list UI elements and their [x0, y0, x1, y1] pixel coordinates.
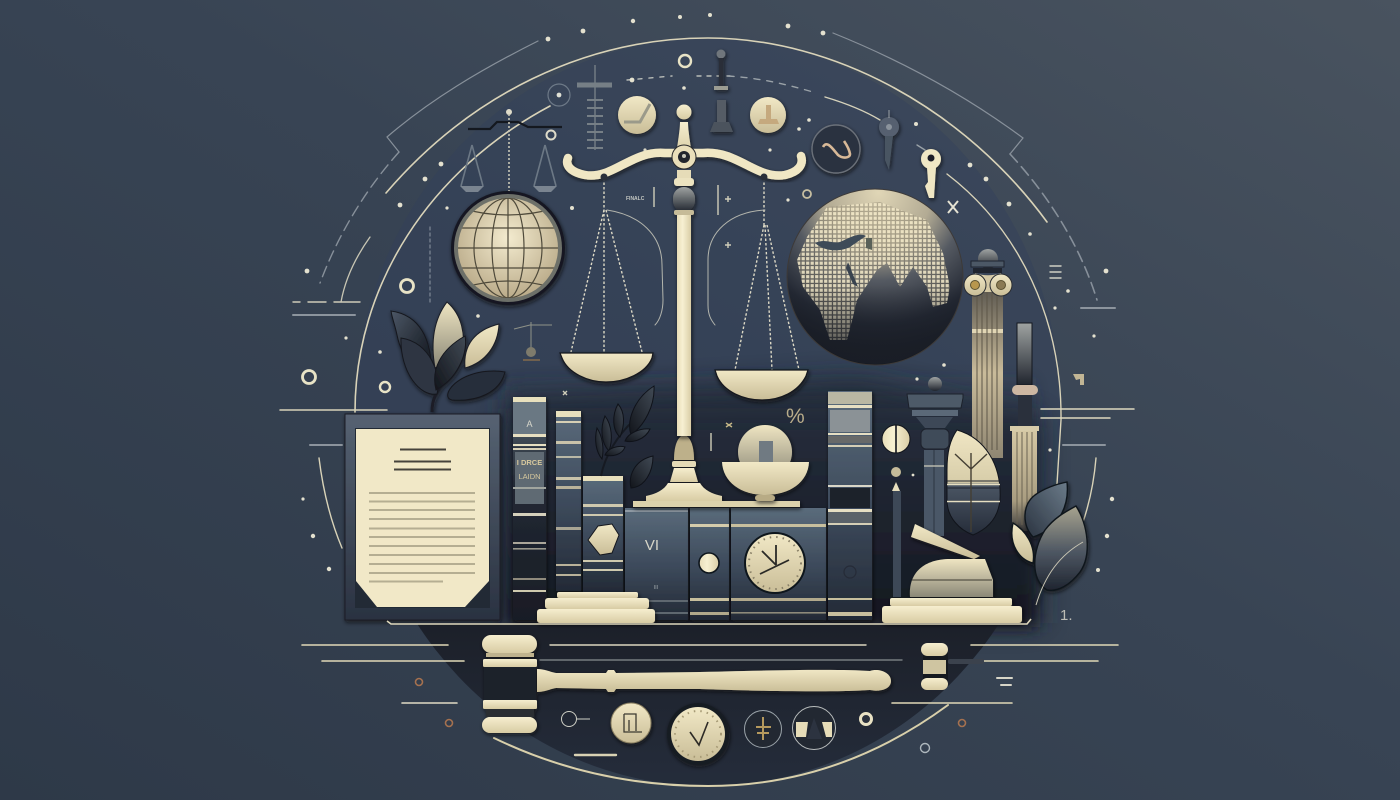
leaves: lower right: [1012, 482, 1087, 605]
icon: cream key: [921, 149, 941, 198]
chevron mark: [1073, 374, 1084, 385]
book title: I DRCE: [517, 458, 542, 467]
tiny caption: FINALC: [626, 196, 645, 202]
beam: [567, 153, 802, 176]
book: narrow spine with knob: [690, 508, 729, 620]
document body lines: [369, 493, 475, 582]
icon: document badge: [611, 703, 651, 743]
book: tall right spine: [828, 391, 872, 620]
panel: dark emblem circle floor: [418, 364, 1058, 785]
icon: small balance scale: [460, 109, 562, 192]
icon: gavel: [482, 635, 891, 733]
icon: bottom badges: [562, 703, 872, 765]
book: tall dark spine: [513, 397, 546, 620]
ornamental arcs and lines: [280, 33, 1134, 786]
icon: scale badge: [792, 706, 836, 750]
book subtitle: LAIDN: [518, 472, 541, 481]
icon: cross post: [577, 65, 612, 150]
icon: justice scale: [560, 104, 808, 507]
book small mark: III: [654, 585, 658, 591]
icon: small gavel: [921, 643, 984, 690]
icon: key-ring mark: [562, 712, 590, 726]
gavel head: [484, 666, 536, 701]
icon: cream gavel on base: [882, 524, 1022, 623]
book emblem: VI: [645, 537, 659, 554]
icon: ionic column: [964, 249, 1012, 458]
cross mark: [948, 201, 958, 213]
icon: slim post: [891, 467, 901, 597]
book: wide spine V: [625, 508, 688, 620]
book: wide spine with clock: [731, 508, 826, 620]
icon: dark disc with swirl: [812, 125, 860, 173]
base: [633, 435, 800, 507]
book: second spine: [556, 411, 581, 591]
icon: small marks: [563, 185, 732, 451]
icon: small scale behind: [514, 322, 552, 360]
icon: cream pedestal left: [537, 592, 655, 623]
icon: wireframe globe: [451, 191, 565, 305]
decorative dots and rings: [301, 13, 1114, 752]
book: third spine with badge: [583, 476, 623, 592]
percent mark: %: [786, 405, 805, 428]
document heading lines: [394, 450, 451, 470]
book emblem: A: [526, 419, 533, 429]
pole: [673, 104, 695, 436]
icon: half-cream leaf: [947, 430, 1000, 535]
icon: top disc with pencil: [618, 96, 656, 134]
icon: plant left: [391, 302, 505, 412]
pan left: [560, 353, 653, 382]
icon: pawn post: [710, 50, 733, 132]
icon: ring: [860, 714, 872, 724]
icon: document: [345, 414, 500, 620]
chain caps: [600, 174, 768, 180]
books: row of spines: [513, 391, 872, 620]
icon: pedestal column: [907, 377, 963, 536]
chains right: [735, 178, 799, 370]
pan right: [715, 370, 808, 400]
icon: clock badge: [667, 703, 729, 765]
number label: 1.: [1060, 607, 1073, 624]
icon: dark cross badge: [744, 710, 782, 748]
icon: split ball: [882, 425, 910, 453]
icon: top disc with stand: [750, 97, 786, 133]
pivot: [672, 145, 696, 178]
icon: sphere bowl: [722, 425, 809, 501]
icon: dotted world globe: [787, 189, 963, 365]
gavel handle: [537, 669, 891, 692]
icon: dark plant in books: [596, 386, 654, 488]
icon: dark key: [879, 110, 899, 170]
icon: clock: [745, 533, 805, 593]
shelf line: [387, 619, 1031, 624]
icon: slim column: [1010, 323, 1039, 531]
chains left: [571, 178, 642, 352]
